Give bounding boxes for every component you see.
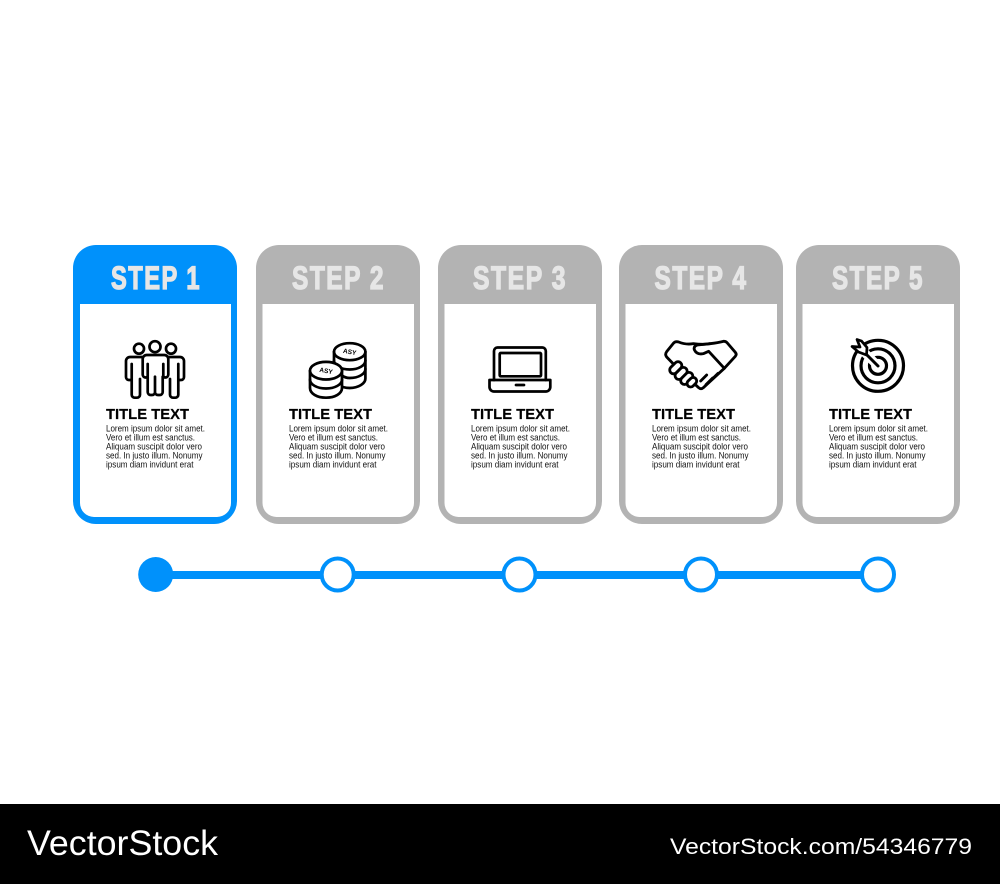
footer url text: VectorStock.com/54346779 [670,834,972,859]
body text: Lorem ipsum dolor sit amet. [289,424,388,434]
footer bar [0,804,1000,884]
body text: ipsum diam invidunt erat [652,460,740,470]
body text [106,424,205,470]
title text: TITLE TEXT [106,406,189,423]
icon: coins [310,343,365,398]
body text [652,424,751,470]
body text: Aliquam suscipit dolor vero [289,442,385,452]
body text [289,424,388,470]
body text: Lorem ipsum dolor sit amet. [106,424,205,434]
coin marks [319,348,357,376]
icon: handshake [666,341,736,389]
body text [471,424,570,470]
title text: TITLE TEXT [471,406,554,423]
title text: TITLE TEXT [652,406,735,423]
body text: ipsum diam invidunt erat [471,460,559,470]
panel: step 1 [73,245,237,524]
body text: Vero et illum est sanctus. [289,433,378,443]
coin marks: ASY [342,348,357,357]
body text: Lorem ipsum dolor sit amet. [829,424,928,434]
body text: ipsum diam invidunt erat [829,460,917,470]
heading: step 1: STEP 1 [111,260,201,296]
title text: TITLE TEXT [289,406,372,423]
body text: Vero et illum est sanctus. [829,433,918,443]
heading: step 5: STEP 5 [832,260,924,296]
heading: step 3: STEP 3 [473,260,567,296]
body text: Lorem ipsum dolor sit amet. [652,424,751,434]
body text: Aliquam suscipit dolor vero [652,442,748,452]
icon: laptop [490,348,550,392]
body text: sed. In justo illum. Nonumy [652,451,749,461]
icon: target [852,340,904,391]
heading: step 2: STEP 2 [292,260,385,296]
panel: step 3 [438,245,602,524]
panel: step 5 [796,245,960,524]
icon: people [126,341,184,398]
timeline [138,557,894,592]
body text: Vero et illum est sanctus. [652,433,741,443]
body text: Vero et illum est sanctus. [471,433,560,443]
body text: Vero et illum est sanctus. [106,433,195,443]
body text: sed. In justo illum. Nonumy [289,451,386,461]
body text [829,424,928,470]
heading: step 4: STEP 4 [654,260,748,296]
body text: Aliquam suscipit dolor vero [106,442,202,452]
title text: TITLE TEXT [829,406,912,423]
body text: Lorem ipsum dolor sit amet. [471,424,570,434]
footer logo text: VectorStock [27,824,219,863]
panel: step 2 [256,245,420,524]
body text: ipsum diam invidunt erat [289,460,377,470]
coin marks: ASY [319,367,334,376]
panel: step 4 [619,245,783,524]
body text: Aliquam suscipit dolor vero [829,442,925,452]
body text: sed. In justo illum. Nonumy [106,451,203,461]
body text: ipsum diam invidunt erat [106,460,194,470]
body text: sed. In justo illum. Nonumy [471,451,568,461]
body text: Aliquam suscipit dolor vero [471,442,567,452]
body text: sed. In justo illum. Nonumy [829,451,926,461]
